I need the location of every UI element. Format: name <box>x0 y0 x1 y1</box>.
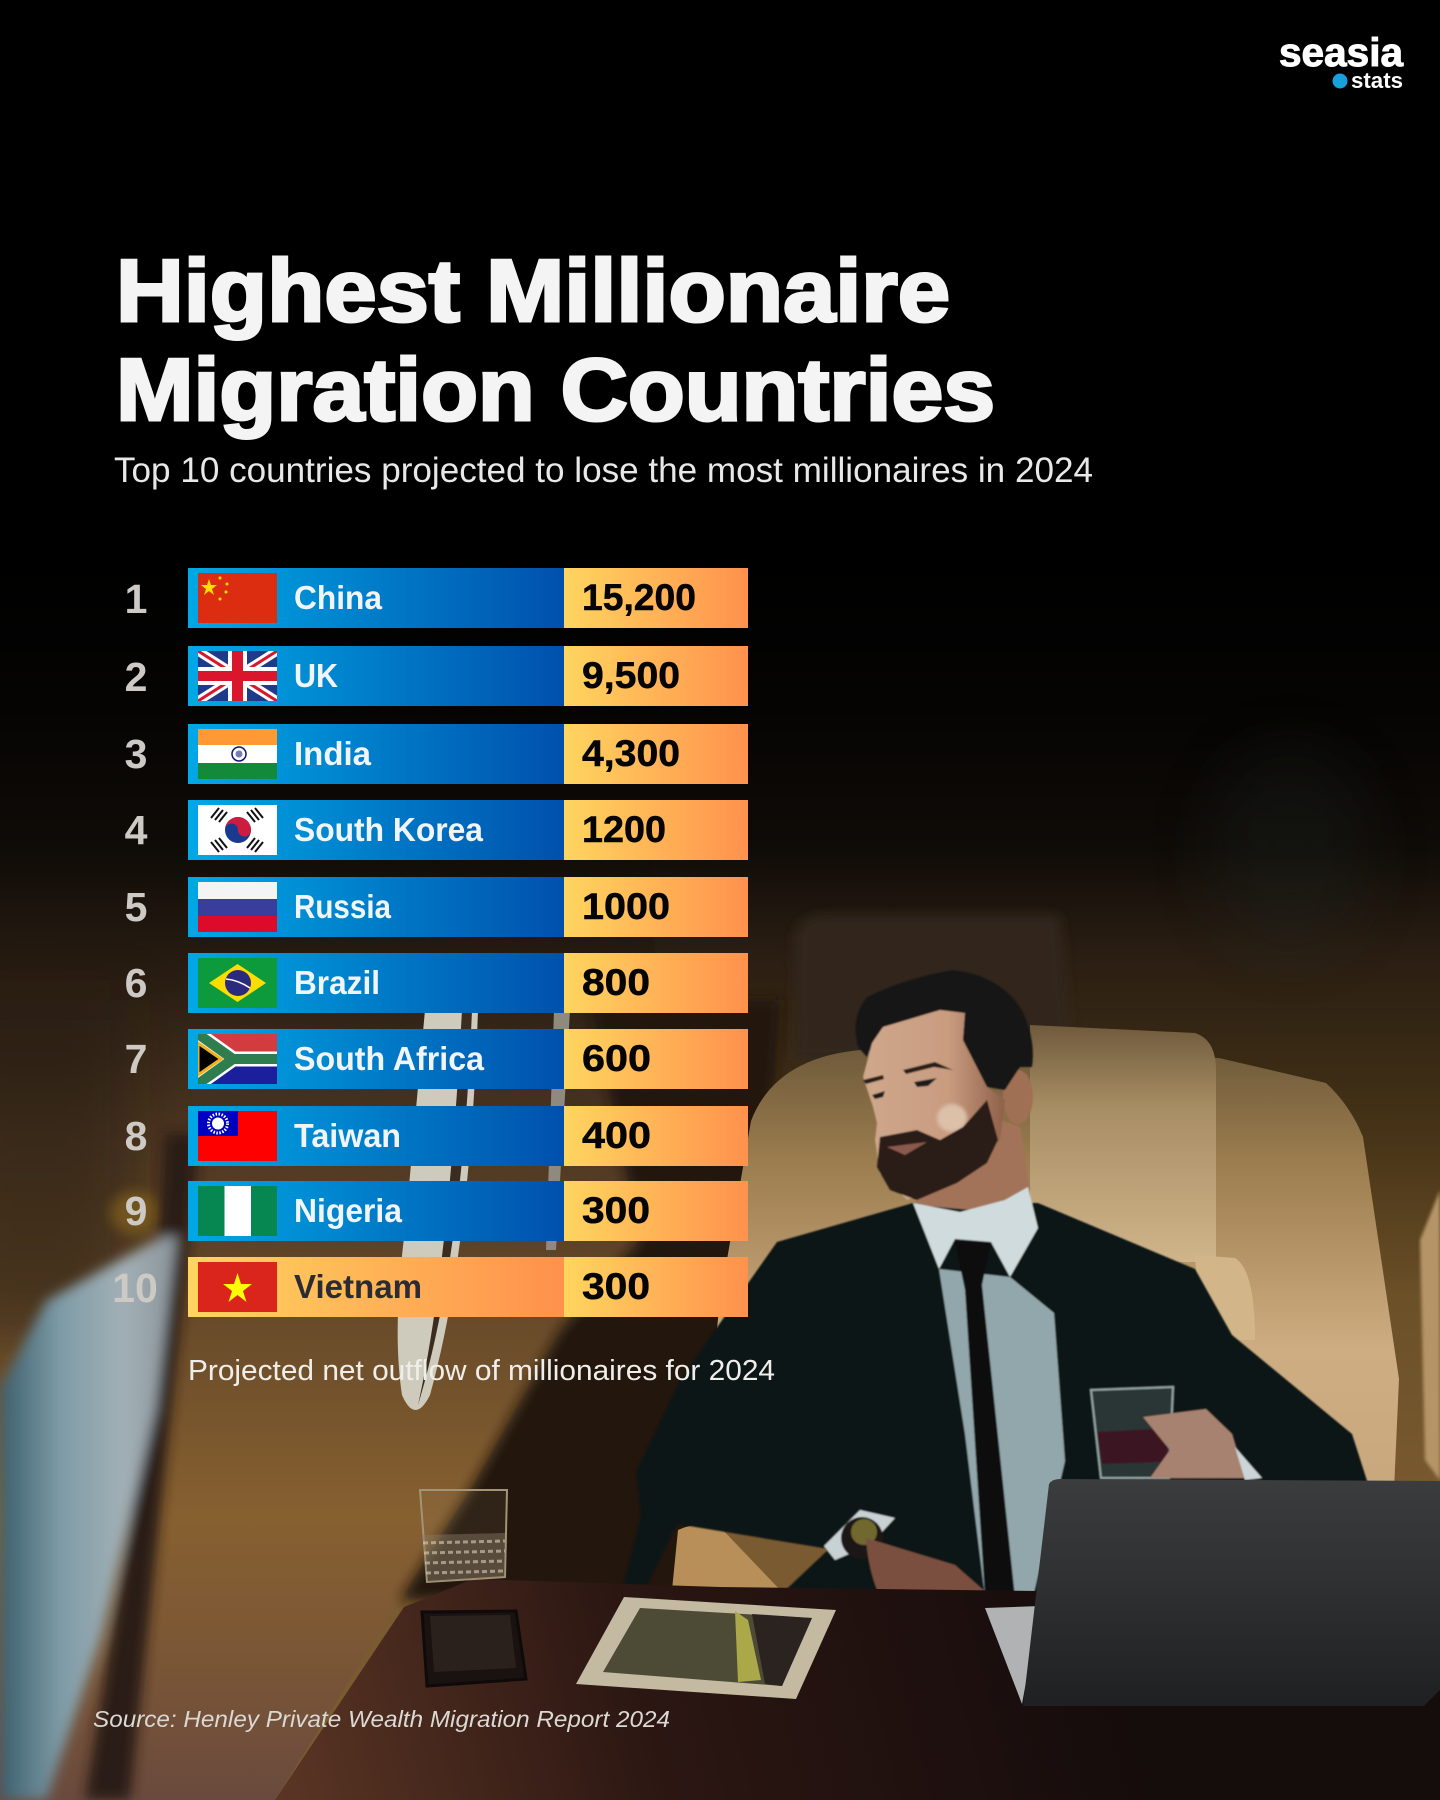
man <box>622 970 1370 1600</box>
logo: seasia stats <box>1279 31 1404 93</box>
row 7: South Africa: South Africa <box>294 1040 485 1077</box>
water <box>422 1533 505 1582</box>
row 1: China: China <box>294 579 383 616</box>
neck <box>915 1120 1030 1212</box>
blurred curtain window at left <box>0 1133 200 1800</box>
row 3: India <box>125 724 748 784</box>
flag: India <box>198 729 277 779</box>
beard <box>877 1100 998 1200</box>
lower hand <box>866 1538 989 1597</box>
upper cuff <box>1235 1447 1262 1480</box>
row 7: South Africa <box>125 1029 748 1089</box>
row 10: Vietnam: Vietnam <box>294 1268 422 1305</box>
flag: South Korea <box>198 805 277 855</box>
left glass on table <box>420 1490 507 1582</box>
flag: Nigeria <box>198 1186 277 1236</box>
title: Migration Countries <box>116 340 995 439</box>
left dark wall column <box>0 1000 130 1340</box>
watch <box>841 1517 883 1559</box>
teal haze on far wall <box>1210 750 1370 950</box>
row 10: Vietnam: 10 <box>112 1265 158 1311</box>
row 5: Russia: Russia <box>294 888 392 925</box>
dark side panel behind man <box>400 1000 780 1600</box>
row 1: China <box>125 568 748 628</box>
flag: Brazil <box>198 958 277 1008</box>
row 4: South Korea: 1200 <box>582 809 666 850</box>
row 1: China: 15,200 <box>582 577 696 618</box>
table <box>275 1579 1440 1800</box>
flag: Vietnam <box>198 1262 277 1312</box>
oval window <box>398 1010 478 1410</box>
laptop <box>985 1479 1440 1706</box>
ear <box>1003 1070 1033 1124</box>
row 6: Brazil: 800 <box>582 962 650 1003</box>
row 2: UK: 2 <box>125 654 147 700</box>
raised glass <box>1091 1387 1173 1478</box>
title <box>116 241 995 439</box>
cuff <box>824 1510 895 1560</box>
row 4: South Korea: South Korea <box>294 811 484 848</box>
row 10: Vietnam: 300 <box>582 1266 650 1307</box>
row 5: Russia: 1000 <box>582 886 670 927</box>
source note: Source: Henley Private Wealth Migration Report 2024 <box>93 1706 670 1732</box>
flag: South Africa <box>198 1034 277 1084</box>
shirt <box>939 1269 1065 1597</box>
drink <box>1097 1428 1170 1464</box>
row 8: Taiwan: 400 <box>582 1115 651 1156</box>
face <box>863 1008 1005 1200</box>
row 5: Russia <box>125 877 748 937</box>
row 1: China: 1 <box>125 576 147 622</box>
row 4: South Korea <box>125 800 748 860</box>
row 7: South Africa: 600 <box>582 1038 651 1079</box>
row 3: India: 4,300 <box>582 733 680 774</box>
eyes and brows <box>863 1062 953 1084</box>
row 7: South Africa: 7 <box>125 1036 147 1082</box>
tablet <box>576 1597 836 1699</box>
upper hand <box>1143 1409 1245 1478</box>
cabin wall <box>0 860 670 1800</box>
subtitle: Top 10 countries projected to lose the most millionaires in 2024 <box>114 451 1093 490</box>
row 5: Russia: 5 <box>125 884 147 930</box>
row 3: India: India <box>294 735 372 772</box>
tie <box>955 1242 1015 1597</box>
second window sliver <box>546 1010 570 1250</box>
lips <box>887 1142 927 1155</box>
far seat headrests <box>795 915 1072 1060</box>
bar chart: top 10 countries <box>112 568 748 1317</box>
row 6: Brazil: Brazil <box>294 964 380 1001</box>
logo: seasia stats: seasia <box>1279 31 1404 75</box>
cheek highlight <box>937 1104 967 1132</box>
logo: seasia stats: stats <box>1351 68 1403 93</box>
flag: Taiwan <box>198 1111 277 1161</box>
hair <box>855 970 1033 1090</box>
title: Highest Millionaire <box>116 241 950 340</box>
row 6: Brazil <box>125 953 748 1013</box>
row 2: UK <box>125 646 748 706</box>
flag: Russia <box>198 882 277 932</box>
row 8: Taiwan <box>125 1106 748 1166</box>
row 9: Nigeria <box>125 1181 748 1241</box>
row 10: Vietnam <box>112 1257 748 1317</box>
chart caption: Projected net outflow of millionaires for 2024 <box>188 1355 775 1387</box>
row 9: Nigeria: Nigeria <box>294 1192 403 1229</box>
row 2: UK: 9,500 <box>582 655 680 696</box>
passenger seat <box>672 1025 1399 1595</box>
row 8: Taiwan: 8 <box>125 1113 147 1159</box>
jacket <box>622 1203 1370 1600</box>
row 6: Brazil: 6 <box>125 960 147 1006</box>
collar <box>913 1187 1038 1277</box>
flag: China <box>198 573 277 623</box>
row 3: India: 3 <box>125 731 147 777</box>
icon: blue dot <box>1332 74 1348 88</box>
row 9: Nigeria: 300 <box>582 1190 650 1231</box>
row 4: South Korea: 4 <box>125 807 148 853</box>
phone <box>422 1611 526 1686</box>
flag: UK <box>198 651 277 701</box>
right seat edge <box>1420 1190 1440 1480</box>
row 2: UK: UK <box>294 657 338 694</box>
row 9: Nigeria: 9 <box>125 1188 147 1234</box>
lamp glow behind rank 9 <box>110 1191 162 1235</box>
row 8: Taiwan: Taiwan <box>294 1117 401 1154</box>
